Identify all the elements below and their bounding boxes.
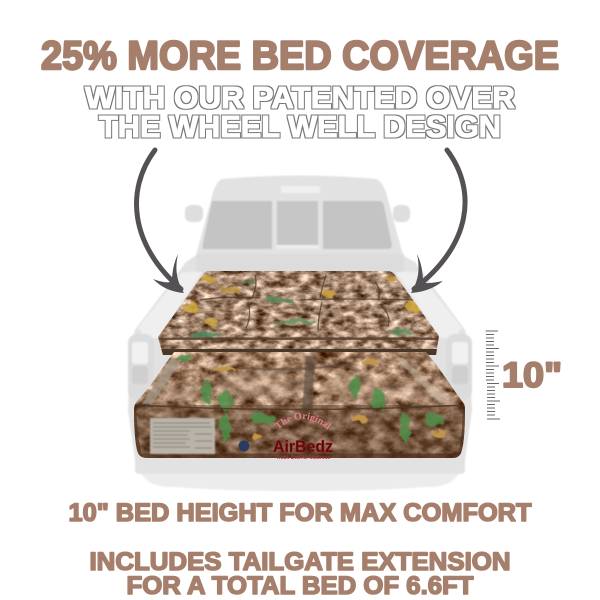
subtitle: patented design: THE WHEEL WELL DESIGN <box>99 109 501 144</box>
brand logo on mattress: The Original <box>274 412 332 430</box>
yellow-orange leaves <box>214 359 448 440</box>
yellow and green leaves <box>182 275 421 338</box>
subtitle: patented design <box>85 80 515 144</box>
brand logo on mattress <box>273 412 333 461</box>
bed headboard <box>196 254 404 273</box>
branch lines and tuft seams <box>172 275 432 338</box>
caption: bed height: 10" BED HEIGHT FOR MAX COMFORT <box>68 499 532 527</box>
cab roof light <box>281 186 320 193</box>
left tail light <box>128 334 154 400</box>
title: 25% MORE BED COVERAGE <box>41 34 559 78</box>
brand logo on mattress: AirBedz <box>273 437 333 456</box>
bumper <box>142 474 458 487</box>
truck cab <box>196 176 403 255</box>
edge shading <box>134 405 465 456</box>
top highlights <box>163 371 447 403</box>
truck photo, faded <box>128 176 472 491</box>
green leaves <box>176 355 443 443</box>
left mirror <box>185 205 203 222</box>
right tail light <box>446 334 472 400</box>
rear window <box>202 201 392 249</box>
caption: tailgate extension: FOR A TOTAL BED OF 6.6FT <box>126 572 474 600</box>
mattress: back section <box>158 271 439 355</box>
right rail highlight <box>396 272 462 338</box>
tailgate <box>135 459 465 474</box>
caption: tailgate extension <box>90 548 511 600</box>
height label: 10" <box>502 356 562 395</box>
fold shading <box>150 338 450 340</box>
right arrow <box>411 150 465 293</box>
right mirror <box>393 205 410 222</box>
tree trunks <box>142 356 452 412</box>
truck bed and rails <box>128 254 472 460</box>
truck shadow <box>150 473 450 491</box>
air valve <box>238 440 250 452</box>
subtitle: patented design: WITH OUR PATENTED OVER <box>85 80 515 115</box>
brand logo on mattress: Truck Bed Air Mattress <box>276 455 330 461</box>
warning label <box>150 418 215 454</box>
front side panel <box>130 405 470 460</box>
mattress: front section <box>130 350 470 460</box>
left arrow <box>137 150 184 293</box>
caption: tailgate extension: INCLUDES TAILGATE EXTENSION <box>90 548 511 576</box>
seam <box>134 405 465 410</box>
height ruler <box>486 331 500 419</box>
left rail highlight <box>138 272 202 338</box>
